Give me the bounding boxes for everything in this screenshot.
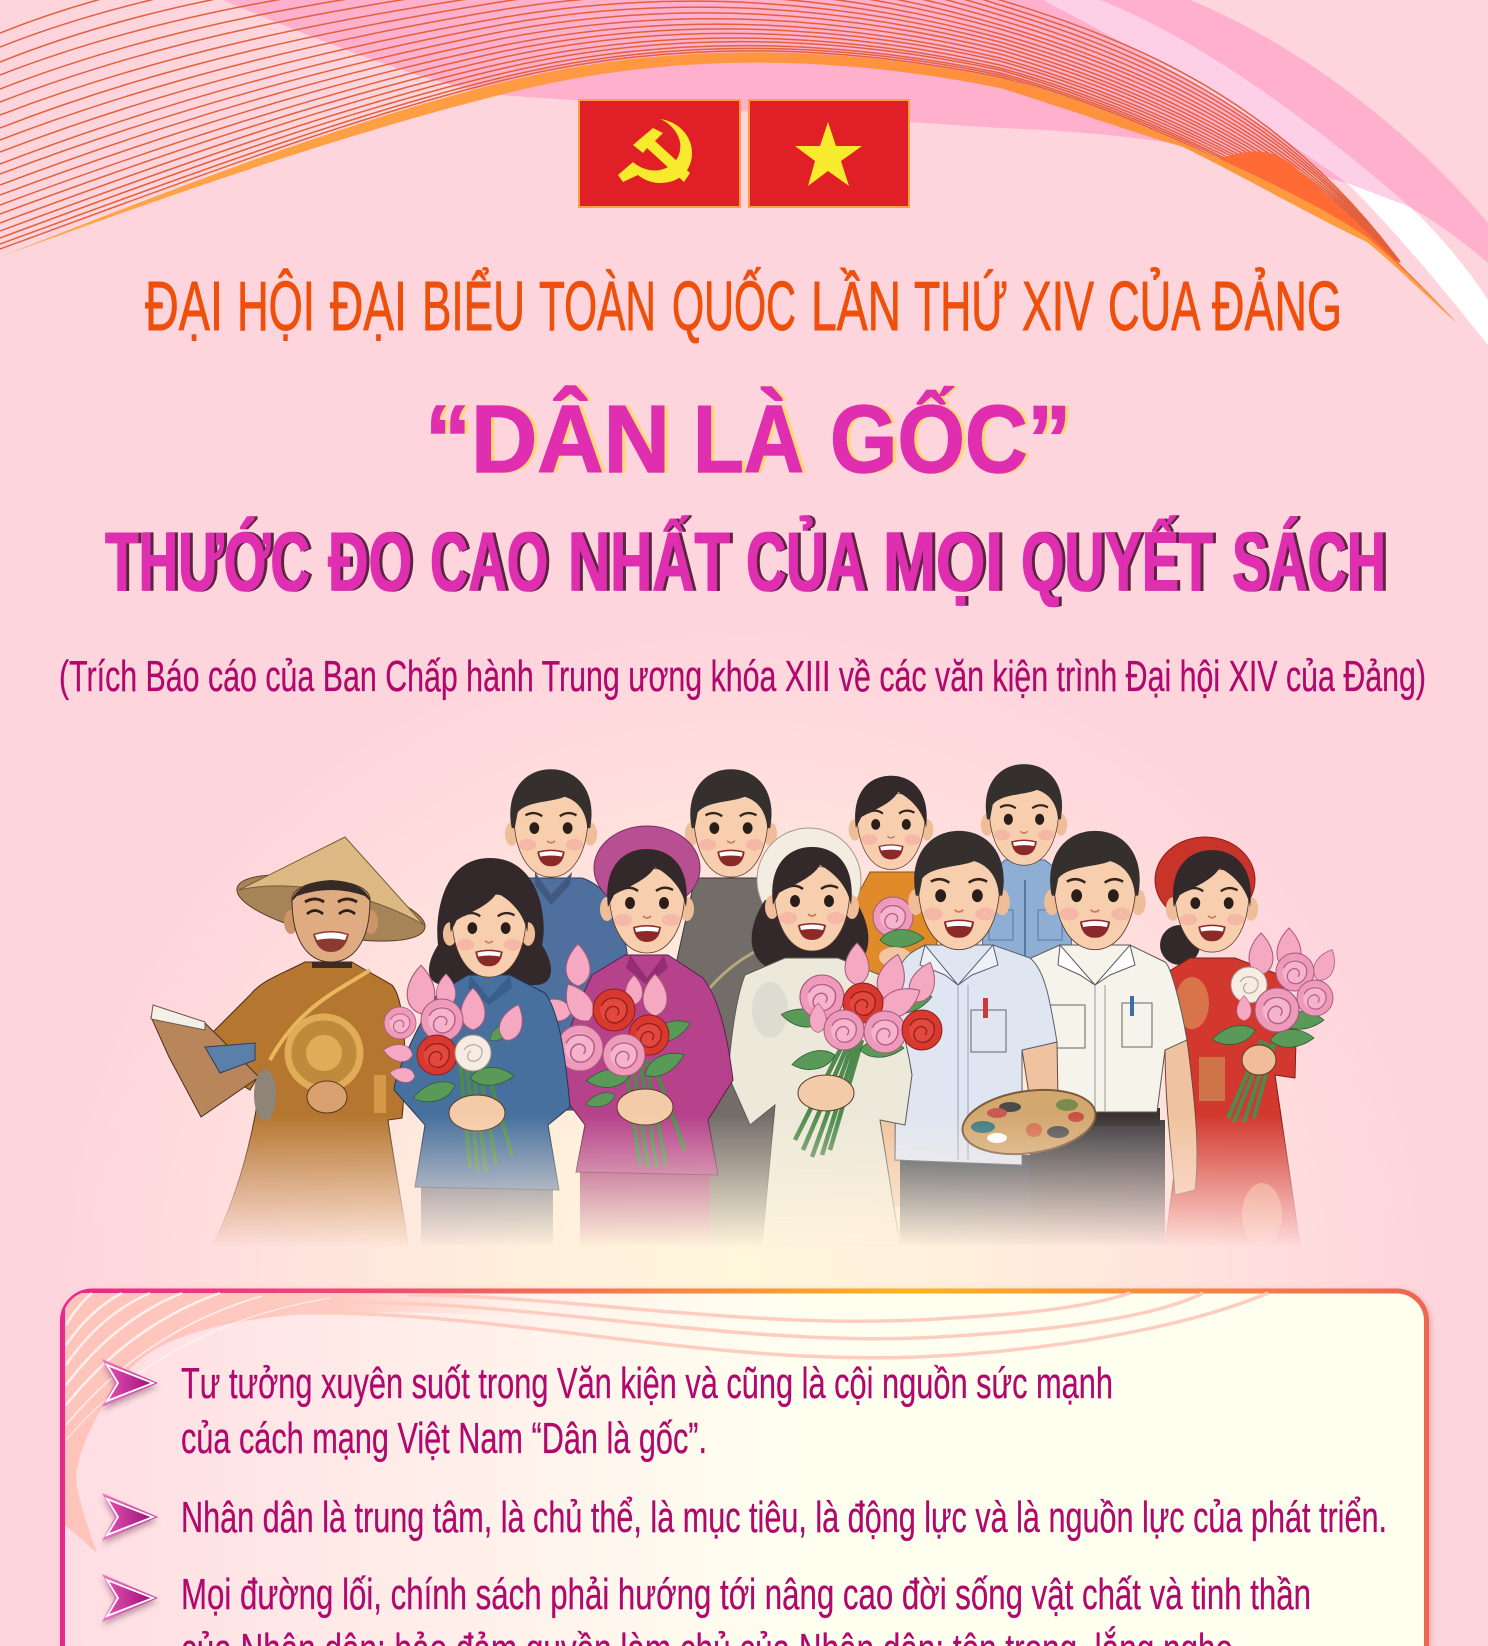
icon: yellow star <box>795 122 862 186</box>
illustration: group of Vietnamese people <box>151 764 1341 1250</box>
heading: highest measure: NHẤT <box>568 514 730 608</box>
farmer face, laughing <box>284 880 378 962</box>
bullet text 3 <box>181 1570 1311 1646</box>
figure: red ao dai woman <box>1155 837 1300 1247</box>
heading: highest measure: MỌI <box>883 515 1003 608</box>
thin orange lines <box>0 0 1400 262</box>
icon: hammer and sickle <box>618 119 692 183</box>
bouquet: blue ao ba woman <box>382 965 529 1172</box>
heading: congress title: ĐẠI <box>330 267 407 345</box>
heading: Dân là gốc: “DÂN <box>425 385 670 493</box>
flag: Vietnam <box>749 100 909 207</box>
icon: arrow bullet 3 <box>102 1574 158 1622</box>
figure: blue ao ba woman <box>394 858 570 1245</box>
flag: Communist Party <box>579 100 740 207</box>
bouquet: white ao dai woman <box>780 943 942 1157</box>
bullet text 1 <box>181 1359 1113 1463</box>
heading: congress title: CỦA <box>1108 266 1201 345</box>
heading: congress title: LẦN <box>811 267 901 345</box>
heading: highest measure: THƯỚC <box>105 515 310 608</box>
pink outer band <box>1100 0 1488 263</box>
light ribbon <box>1043 0 1410 207</box>
bouquet: red woman <box>1210 928 1341 1122</box>
heading: congress title: HỘI <box>237 267 315 345</box>
heading: congress title: XIV <box>1022 267 1094 345</box>
heading: congress title: BIỂU <box>422 266 525 345</box>
icon: arrow bullet 1 <box>102 1359 158 1407</box>
heading: congress title: THỨ <box>914 267 1008 345</box>
figure: man in light blue-white shirt <box>880 831 1058 1245</box>
corner swoosh and waves <box>65 1293 1268 1553</box>
figure: orange dress woman (back) <box>848 776 938 974</box>
panel background and gradient border <box>62 1291 1426 1646</box>
icon: arrow bullet 2 <box>102 1493 158 1541</box>
heading: highest measure: CAO <box>430 515 548 608</box>
orange arc <box>0 52 1457 323</box>
heading: congress title: ĐẢNG <box>1212 267 1342 345</box>
pink wave shape <box>223 0 1347 183</box>
figure: white ao dai woman <box>728 828 912 1245</box>
heading: Dân là gốc: GỐC” <box>830 385 1071 493</box>
heading: highest measure: ĐO <box>328 515 412 608</box>
heading: highest measure: CỦA <box>746 515 865 608</box>
figure: magenta ao dai woman <box>555 826 733 1245</box>
white ribbon <box>1347 183 1488 345</box>
heading: highest measure: SÁCH <box>1232 515 1386 608</box>
bullet text 1: Tư tưởng xuyên suốt trong Văn kiện và cũng là cội nguồn sức mạnh <box>181 1359 1113 1408</box>
red-orange wedge <box>1215 151 1457 323</box>
figure: grey robe man (back) <box>676 769 777 1240</box>
bouquet: magenta ao dai woman <box>550 943 692 1168</box>
figure: man in white shirt <box>1030 831 1197 1245</box>
figure: farmer with conical hat <box>151 837 431 1245</box>
decorative ribbons and orange arc header <box>0 0 1488 345</box>
icon: paint palette <box>962 1088 1096 1156</box>
heading: Dân là gốc: LÀ <box>693 386 804 493</box>
heading: highest measure: QUYẾT <box>1021 515 1213 608</box>
heading: congress title: TOÀN <box>539 267 656 345</box>
heading: congress title: ĐẠI <box>145 267 223 345</box>
bullet text 1: của cách mạng Việt Nam “Dân là gốc”. <box>181 1414 707 1463</box>
figure: blue shirt man (back) <box>981 764 1072 970</box>
heading: congress title: QUỐC <box>672 266 796 345</box>
panel: key points <box>62 1291 1426 1646</box>
figure: blue robe man (back) <box>505 769 628 1110</box>
